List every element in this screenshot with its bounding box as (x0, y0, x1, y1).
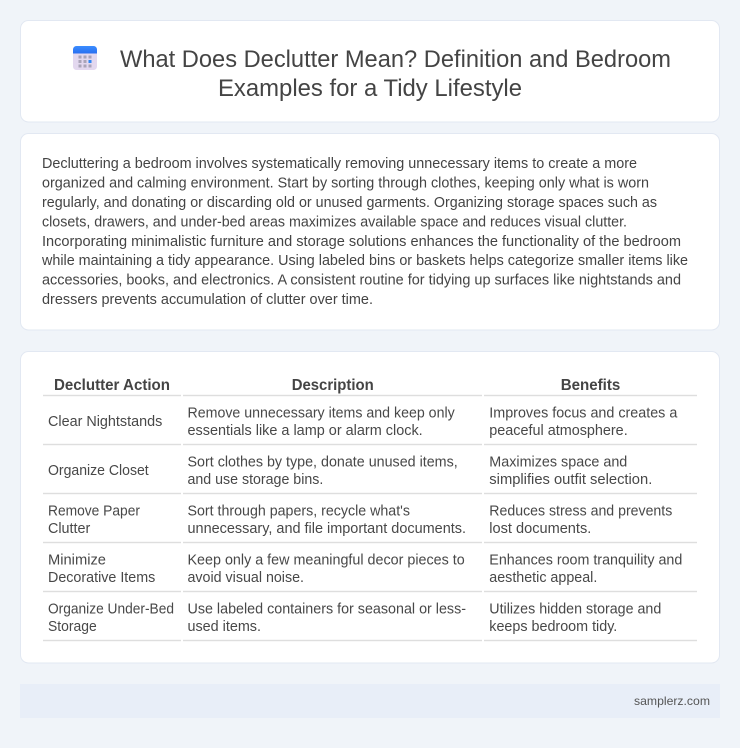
table row: Minimize Decorative Items (43, 552, 697, 592)
table row: Remove Paper Clutter: lost documents. (489, 521, 591, 537)
table row: Minimize Decorative Items: aesthetic appeal. (489, 570, 597, 586)
intro text block: accessories, books, and electronics. A consistent routine for tidying up surfaces like nightstands and (42, 273, 681, 289)
table row: Organize Under-Bed Storage (43, 601, 697, 641)
icon: calendar (73, 46, 97, 70)
intro text block: while maintaining a tidy appearance. Using labeled bins or baskets helps categorize smaller items like (41, 253, 688, 269)
table row: Clear Nightstands: essentials like a lamp or alarm clock. (188, 423, 423, 439)
table row: Organize Under-Bed Storage: keeps bedroom tidy. (489, 619, 617, 635)
table row: Clear Nightstands (43, 405, 697, 445)
intro text block: organized and calming environment. Start by sorting through clothes, keeping only what is worn (42, 175, 649, 191)
table row: Remove Paper Clutter: Reduces stress and prevents (489, 503, 672, 519)
footer bar (20, 684, 720, 718)
table row: Minimize Decorative Items: Decorative Items (48, 570, 155, 586)
table row: Minimize Decorative Items: Keep only a few meaningful decor pieces to (188, 552, 465, 568)
table row: Organize Closet: Maximizes space and (489, 454, 627, 470)
intro text block: dressers prevents accumulation of clutter over time. (42, 292, 373, 308)
table row: Minimize Decorative Items: avoid visual noise. (188, 570, 304, 586)
title (120, 46, 671, 102)
intro text block: Decluttering a bedroom involves systematically removing unnecessary items to create a more (42, 156, 637, 172)
table row: Clear Nightstands: Remove unnecessary items and keep only (188, 405, 455, 421)
table row: Remove Paper Clutter: Clutter (48, 521, 91, 537)
intro text block: Incorporating minimalistic furniture and storage solutions enhances the functionality of the bedroom (42, 234, 681, 250)
footer source text: samplerz.com (634, 694, 710, 708)
intro text block: closets, drawers, and under-bed areas maximizes available space and reduces visual clutter. (42, 214, 627, 230)
table row: Organize Under-Bed Storage: Storage (48, 619, 97, 635)
table row: Organize Closet: simplifies outfit selection. (489, 472, 652, 488)
table row: Minimize Decorative Items: Minimize (48, 552, 106, 568)
title: What Does Declutter Mean? Definition and Bedroom (120, 46, 671, 73)
table header row: Description (292, 377, 374, 394)
table row: Clear Nightstands: Improves focus and creates a (489, 405, 677, 421)
table row: Remove Paper Clutter: unnecessary, and file important documents. (188, 521, 466, 537)
table row: Clear Nightstands: peaceful atmosphere. (489, 423, 628, 439)
panel: intro paragraph (20, 134, 720, 330)
table row: Organize Closet: and use storage bins. (188, 472, 323, 488)
table row: Organize Closet: Organize Closet (48, 463, 149, 479)
table row: Remove Paper Clutter (43, 503, 697, 543)
table row: Remove Paper Clutter: Remove Paper (48, 503, 140, 519)
table header row: Benefits (561, 377, 620, 394)
intro text block (41, 156, 688, 308)
intro text block: regularly, and donating or discarding old or unused garments. Organizing storage spaces such as (42, 195, 657, 211)
table row: Organize Under-Bed Storage: Utilizes hidden storage and (489, 601, 661, 617)
table row: Remove Paper Clutter: Sort through papers, recycle what's (188, 503, 410, 519)
title: Examples for a Tidy Lifestyle (218, 75, 522, 102)
table header row (43, 377, 697, 396)
table row: Organize Under-Bed Storage: Use labeled containers for seasonal or less- (188, 601, 466, 617)
table row: Minimize Decorative Items: Enhances room tranquility and (489, 552, 682, 568)
table row: Clear Nightstands: Clear Nightstands (48, 414, 162, 430)
panel: title card (20, 20, 720, 122)
table row: Organize Closet (43, 454, 697, 494)
table row: Organize Under-Bed Storage: Organize Under-Bed (48, 601, 174, 617)
table header row: Declutter Action (54, 377, 170, 394)
table row: Organize Closet: Sort clothes by type, donate unused items, (188, 454, 458, 470)
panel: declutter table (20, 352, 720, 663)
table row: Organize Under-Bed Storage: used items. (188, 619, 261, 635)
